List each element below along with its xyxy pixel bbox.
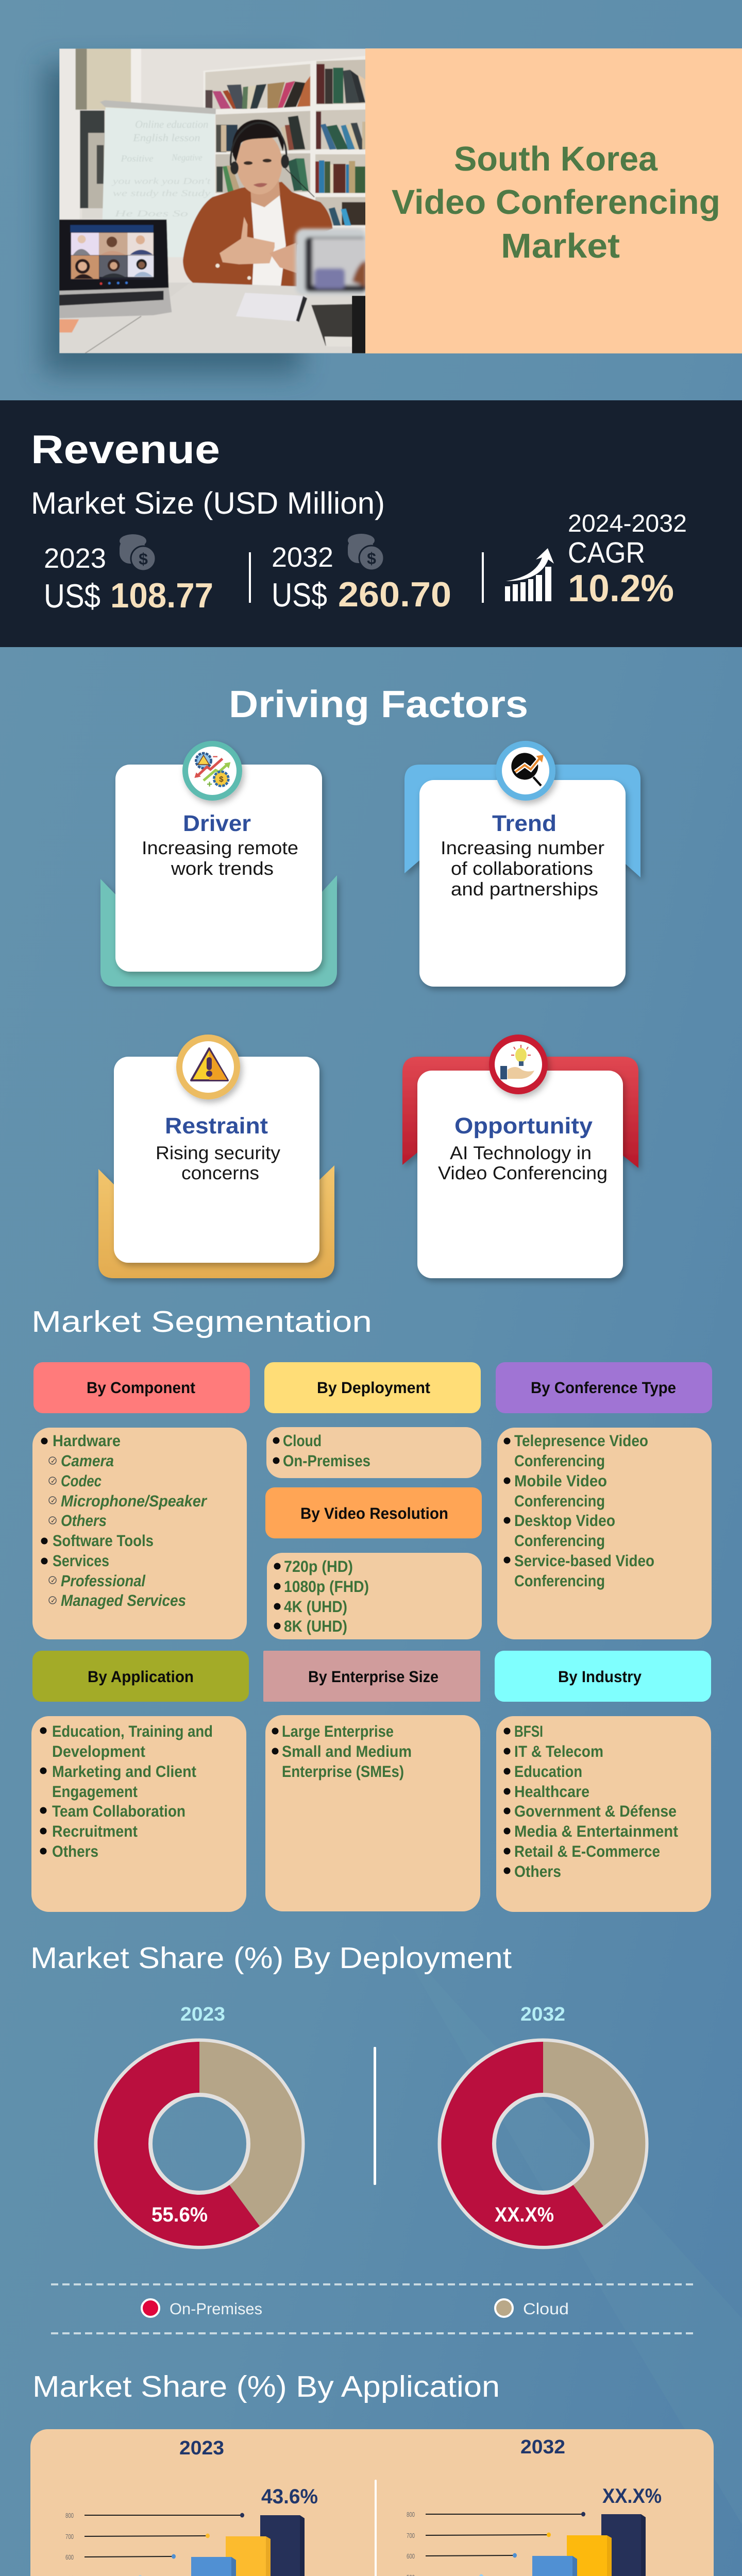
text: driver: work trends [171,858,274,879]
header: by deployment: By Deployment [317,1379,430,1397]
blurred phone and tripod [295,229,366,295]
text: restraint: Rising security [156,1142,280,1163]
icon: coins 2032: $ [367,549,376,568]
panel: component list: Hardware [53,1432,121,1450]
hero photo: man on a video call: Positive [121,153,154,163]
panel: component list: Microphone/Speaker [61,1492,208,1510]
panel: component list: ✓ [50,1497,56,1504]
label: 2032: 2032 [520,2004,565,2025]
panel: deployment list: Cloud [283,1432,322,1450]
label: 2023: 2023 [179,2437,224,2459]
panel: component list [32,1428,247,1639]
heading: market segmentation: Market Segmentation [31,1305,372,1338]
stat: cagr: 2024-2032 [568,510,687,537]
panel: application list: Engagement [52,1783,138,1801]
panel: industry list: Media & Entertainment [514,1822,678,1840]
panel: conference type list: Desktop Video [514,1512,615,1530]
panel: deployment list [266,1427,481,1478]
text: restraint: concerns [181,1162,259,1183]
panel: component list: Software Tools [53,1532,154,1550]
whiteboard [103,108,215,257]
bookshelf [204,56,366,228]
stat: 2032 [272,542,451,614]
panel: conference type list: Conferencing [514,1492,605,1510]
header: by application [32,1651,249,1702]
hero photo: man on a video call: English lesson [133,132,200,143]
panel: application list: Development [52,1742,145,1760]
panel: application bar charts [30,2429,714,2576]
header: by video resolution: By Video Resolution [300,1504,448,1522]
panel: component list: ✓ [50,1477,56,1485]
title panel: Video Conferencing [392,183,720,222]
text: trend: of collaborations [451,858,593,879]
panel: video resolution list: 8K (UHD) [284,1617,347,1635]
panel: component list: ✓ [50,1517,56,1524]
title panel: Market [501,227,620,265]
legend: deployment: On-Premises [170,2300,262,2318]
panel: industry list: Healthcare [514,1783,589,1801]
card: trend [404,741,640,987]
panel: application list: Education, Training and [52,1722,213,1740]
bar chart: 2032: XX.X% [602,2485,662,2507]
heading: market share by deployment: Market Share (%) By Deployment [30,1941,512,1975]
heading: driving factors: Driving Factors [229,683,528,725]
text: opportunity: Video Conferencing [438,1162,608,1183]
photo shadow [44,64,301,374]
text: restraint: Restraint [165,1113,268,1139]
icon: trend [496,741,555,801]
header: by industry [495,1651,711,1702]
text: restraint [156,1113,280,1183]
subheading: market size: Market Size (USD Million) [31,486,385,520]
header: by deployment [264,1362,481,1413]
stat: 2023: 108.77 [110,576,213,615]
stat: cagr [568,510,687,609]
header: by enterprise size: By Enterprise Size [308,1668,439,1686]
panel: revenue [0,400,742,647]
donut chart: 2023 [96,2041,302,2247]
header: by component [33,1362,250,1413]
panel: component list: Others [61,1512,107,1530]
panel: application list [31,1716,246,1912]
title panel [365,48,742,353]
bar chart: 2032: 800 [407,2511,415,2518]
legend: deployment: Cloud [523,2300,569,2318]
stat: 2032: 2032 [272,542,333,573]
hero photo: man on a video call: we study the Study [113,188,211,198]
header: by application: By Application [88,1668,194,1686]
stat: 2023: US$ [44,577,100,615]
laptop [59,287,172,318]
panel: conference type list: Conferencing [514,1572,605,1590]
bar chart: 2023: 600 [65,2553,74,2561]
panel: video resolution list: 720p (HD) [284,1557,353,1575]
panel: deployment list: On-Premises [283,1452,370,1470]
hero photo: man on a video call: Online education [135,118,208,130]
header: by conference type [496,1362,712,1413]
panel: industry list: BFSI [514,1722,543,1740]
donut chart: 2032: XX.X% [495,2204,554,2226]
panel: enterprise size list: Enterprise (SMEs) [282,1762,404,1781]
heading: revenue: Revenue [31,427,220,472]
divider [249,552,251,603]
bar chart: 2023: 800 [65,2512,74,2519]
text: opportunity: Opportunity [454,1113,593,1139]
card: opportunity [402,1035,638,1278]
divider [374,2047,376,2185]
text: opportunity: AI Technology in [450,1142,592,1163]
stat: cagr: 10.2% [568,567,674,609]
icon: growth chart [505,548,554,601]
donut chart: 2032 [440,2041,646,2247]
bar chart: 2032 [407,2485,662,2576]
heading: market share by application: Market Share (%) By Application [32,2370,500,2403]
text: driver: Increasing remote [142,837,298,858]
text: opportunity [438,1113,608,1183]
panel: conference type list: Conferencing [514,1452,605,1470]
card: driver [100,741,337,987]
panel: industry list: Government & Défense [514,1802,677,1820]
text: trend [441,811,604,900]
text: driver: Driver [183,811,251,836]
desk [59,283,366,353]
panel: component list: ✓ [50,1597,56,1604]
bar chart: 2032: 700 [407,2532,415,2539]
text: trend: Increasing number [441,837,604,858]
icon: coins 2023 [120,534,156,571]
stat: cagr: CAGR [568,536,645,569]
panel: video resolution list: 1080p (FHD) [284,1578,369,1596]
panel: conference type list: Telepresence Video [514,1432,648,1450]
panel: industry list: Others [514,1862,561,1880]
bar chart: 2032: 600 [407,2552,415,2560]
text: driver [142,811,298,879]
icon: coins 2023: $ [139,550,148,568]
legend: deployment [142,2299,569,2318]
text: trend: Trend [492,811,556,836]
panel: component list: Managed Services [61,1591,186,1609]
panel: conference type list: Service-based Video [514,1552,654,1570]
stat: 2032: 260.70 [338,575,451,614]
panel: industry list: IT & Telecom [514,1742,603,1760]
header: by video resolution [265,1487,482,1538]
bar chart: 2023 [65,2485,318,2576]
panel: component list: Codec [61,1472,102,1490]
panel: conference type list: Mobile Video [514,1472,607,1490]
icon: driver [182,741,242,801]
panel: enterprise size list [265,1715,480,1911]
hero photo: man on a video call: you work you Don't [111,176,211,186]
man [183,182,333,289]
stat: 2032: US$ [272,576,327,614]
bar chart: 2023: 43.6% [261,2485,318,2508]
panel: industry list: Retail & E-Commerce [514,1842,660,1860]
panel: enterprise size list: Large Enterprise [282,1722,394,1740]
donut chart: 2023: 55.6% [151,2204,208,2226]
title panel: South Korea [454,140,658,178]
header: by component: By Component [87,1379,195,1397]
stat: 2023: 2023 [44,543,106,574]
icon: opportunity [489,1035,548,1094]
label: 2023: 2023 [180,2004,225,2025]
panel: video resolution list [267,1553,482,1639]
divider [482,552,484,603]
text: trend: and partnerships [451,878,598,900]
icon: coins 2032 [348,534,384,570]
panel: industry list [496,1716,711,1912]
label: 2032: 2032 [520,2436,565,2458]
hero photo: man on a video call: Negative [172,152,203,162]
panel: component list: ✓ [50,1577,56,1584]
header: by enterprise size [263,1651,480,1702]
hero photo: man on a video call: He Does So [114,209,188,218]
panel: component list: ✓ [50,1457,56,1465]
panel: industry list: Education [514,1762,582,1781]
icon: warning [176,1035,240,1099]
header: by conference type: By Conference Type [531,1379,676,1397]
panel: application list: Recruitment [52,1822,138,1840]
card: restraint [98,1035,334,1278]
panel: component list: Services [53,1552,109,1570]
panel: video resolution list: 4K (UHD) [284,1598,347,1616]
panel: enterprise size list: Small and Medium [282,1742,412,1760]
icon: driver: $ [219,774,224,784]
hero photo: man on a video call [59,48,366,353]
panel: component list: Professional [61,1572,146,1590]
panel: application list: Others [52,1842,98,1860]
panel: conference type list: Conferencing [514,1532,605,1550]
panel: application list: Marketing and Client [52,1762,196,1781]
header: by industry: By Industry [558,1668,642,1686]
panel: conference type list [497,1428,712,1639]
bar chart: 2023: 700 [65,2533,74,2540]
stat: 2023 [44,543,213,615]
panel: application list: Team Collaboration [52,1802,185,1820]
panel: component list: Camera [61,1452,114,1470]
